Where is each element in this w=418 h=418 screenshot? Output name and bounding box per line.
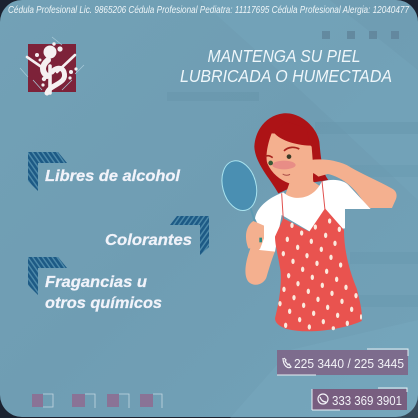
- title: MANTENGA SU PIEL: [208, 46, 360, 66]
- whatsapp box: [312, 388, 407, 410]
- eyes and brows: [265, 147, 299, 175]
- cheek blush: [272, 161, 296, 169]
- bracket: fragancias: [28, 257, 67, 295]
- background light streaks: [167, 0, 418, 418]
- icon: telephone: [283, 358, 291, 368]
- spaghetti straps: [282, 181, 325, 220]
- icon: whatsapp: [318, 394, 328, 404]
- mirror handle detail: [257, 238, 265, 242]
- logo: [20, 37, 84, 93]
- bracket: alcohol: [28, 152, 67, 191]
- label: fragancias u otros quimicos: otros químicos: [45, 295, 162, 312]
- hair fringe: [273, 122, 310, 146]
- title: [180, 46, 392, 86]
- mirror: [217, 157, 262, 222]
- hand holding mirror: [246, 221, 264, 249]
- white t-shirt: [255, 180, 371, 252]
- title: LUBRICADA O HUMECTADA: [180, 66, 392, 86]
- label: colorantes: Colorantes: [105, 232, 192, 249]
- whatsapp box: 333 369 3901: [332, 394, 402, 408]
- bottom decorative squares: [32, 394, 162, 408]
- bracket: colorantes: [170, 216, 209, 255]
- phone box: 225 3440 / 225 3445: [294, 357, 404, 371]
- raised arm: [310, 159, 397, 208]
- label: fragancias u otros quimicos: [45, 274, 162, 312]
- decorative top squares: [322, 31, 399, 39]
- hair: [254, 113, 328, 193]
- illustration: woman with mirror: [217, 113, 397, 331]
- hand on face: [293, 160, 330, 177]
- label: libres de alcohol: Libres de alcohol: [45, 168, 181, 185]
- label: fragancias u otros quimicos: Fragancias u: [45, 274, 147, 291]
- red polka-dot dress: [275, 208, 362, 331]
- polka dots: [278, 218, 362, 330]
- phone box: [277, 349, 408, 375]
- forearm: [245, 245, 275, 285]
- neck and face: [267, 133, 323, 205]
